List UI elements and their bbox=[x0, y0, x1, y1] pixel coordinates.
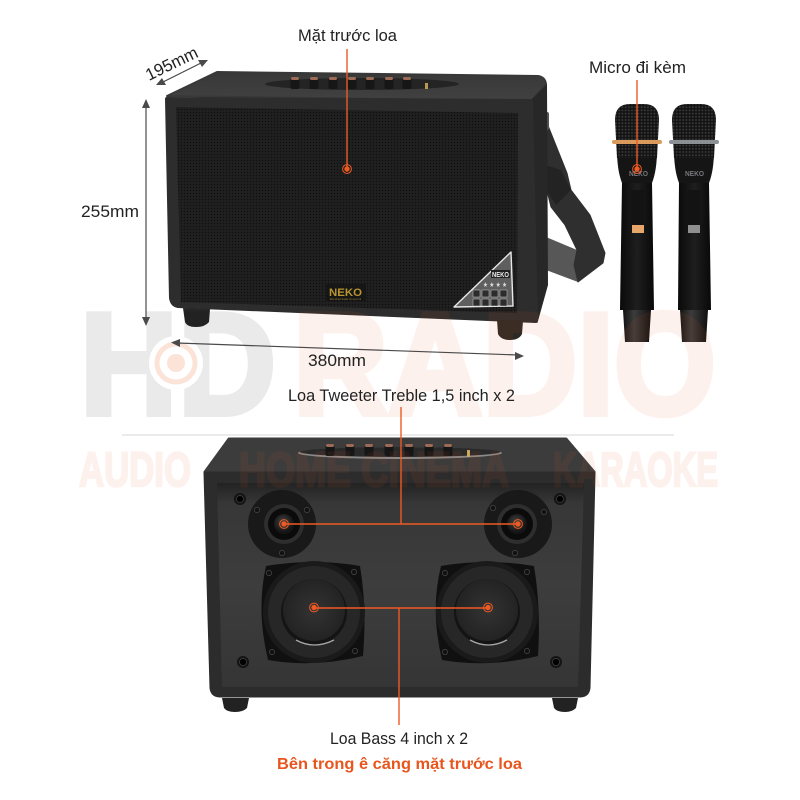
label: bass: Loa Bass 4 inch x 2 bbox=[330, 729, 468, 748]
rear top face bbox=[205, 439, 594, 472]
callout: bass bbox=[310, 603, 492, 725]
dimension arrow: width bbox=[171, 339, 524, 360]
callout: tweeters bbox=[280, 407, 522, 528]
callout: microphone bbox=[633, 80, 641, 173]
front speaker bbox=[167, 72, 548, 340]
microphone with silver ring bbox=[669, 104, 719, 342]
specification badge: ★ ★ ★ ★ bbox=[483, 281, 507, 289]
callout: front bbox=[343, 49, 351, 173]
rear feet bbox=[222, 698, 578, 712]
watermark RADIO: RADIO bbox=[293, 283, 716, 445]
speaker grille bbox=[176, 107, 518, 313]
feet bbox=[183, 308, 523, 340]
strap bbox=[543, 112, 605, 282]
rear speaker bbox=[205, 439, 594, 712]
label: width: 380mm bbox=[308, 351, 366, 370]
watermark bbox=[79, 283, 718, 497]
label: microphones: Micro đi kèm bbox=[589, 58, 686, 77]
right bass driver bbox=[436, 561, 539, 663]
rear frame bbox=[205, 473, 594, 696]
control recess and knobs bbox=[265, 77, 459, 90]
rear inner panel bbox=[217, 483, 584, 687]
NEKO logo: NEKO bbox=[329, 287, 362, 299]
microphone with orange ring bbox=[612, 104, 662, 342]
watermark AUDIO HOME CINEMA KARAOKE: KARAOKE bbox=[553, 444, 718, 497]
right tweeter bbox=[484, 490, 552, 558]
label: front: Mặt trước loa bbox=[298, 26, 398, 45]
left bass driver bbox=[261, 561, 365, 663]
watermark target icon bbox=[149, 336, 203, 418]
NEKO logo bbox=[326, 284, 366, 301]
left tweeter bbox=[248, 490, 316, 558]
dimension arrow: depth bbox=[156, 60, 208, 85]
speaker front frame bbox=[167, 99, 536, 321]
NEKO logo: Entertainment bbox=[330, 297, 361, 301]
microphone with silver ring: NEKO bbox=[685, 171, 705, 178]
label: depth: 195mm bbox=[142, 43, 201, 85]
watermark AUDIO HOME CINEMA KARAOKE bbox=[79, 444, 718, 497]
label: tweeter: Loa Tweeter Treble 1,5 inch x 2 bbox=[288, 386, 515, 405]
cabinet screws bbox=[234, 493, 566, 668]
label: height: 255mm bbox=[81, 202, 139, 221]
speaker side bbox=[530, 84, 548, 322]
speaker top face bbox=[167, 72, 546, 101]
rear control recess and knobs bbox=[298, 444, 502, 459]
specification badge bbox=[454, 252, 513, 307]
microphone with orange ring: NEKO bbox=[629, 171, 649, 178]
dimension arrow: height bbox=[142, 99, 150, 326]
caption: Bên trong ê căng mặt trước loa bbox=[277, 756, 522, 773]
watermark HD: HD bbox=[80, 283, 276, 445]
specification badge: NEKO bbox=[492, 272, 509, 279]
watermark AUDIO HOME CINEMA KARAOKE: AUDIO bbox=[79, 444, 191, 497]
watermark AUDIO HOME CINEMA KARAOKE: HOME CINEMA bbox=[239, 444, 509, 497]
